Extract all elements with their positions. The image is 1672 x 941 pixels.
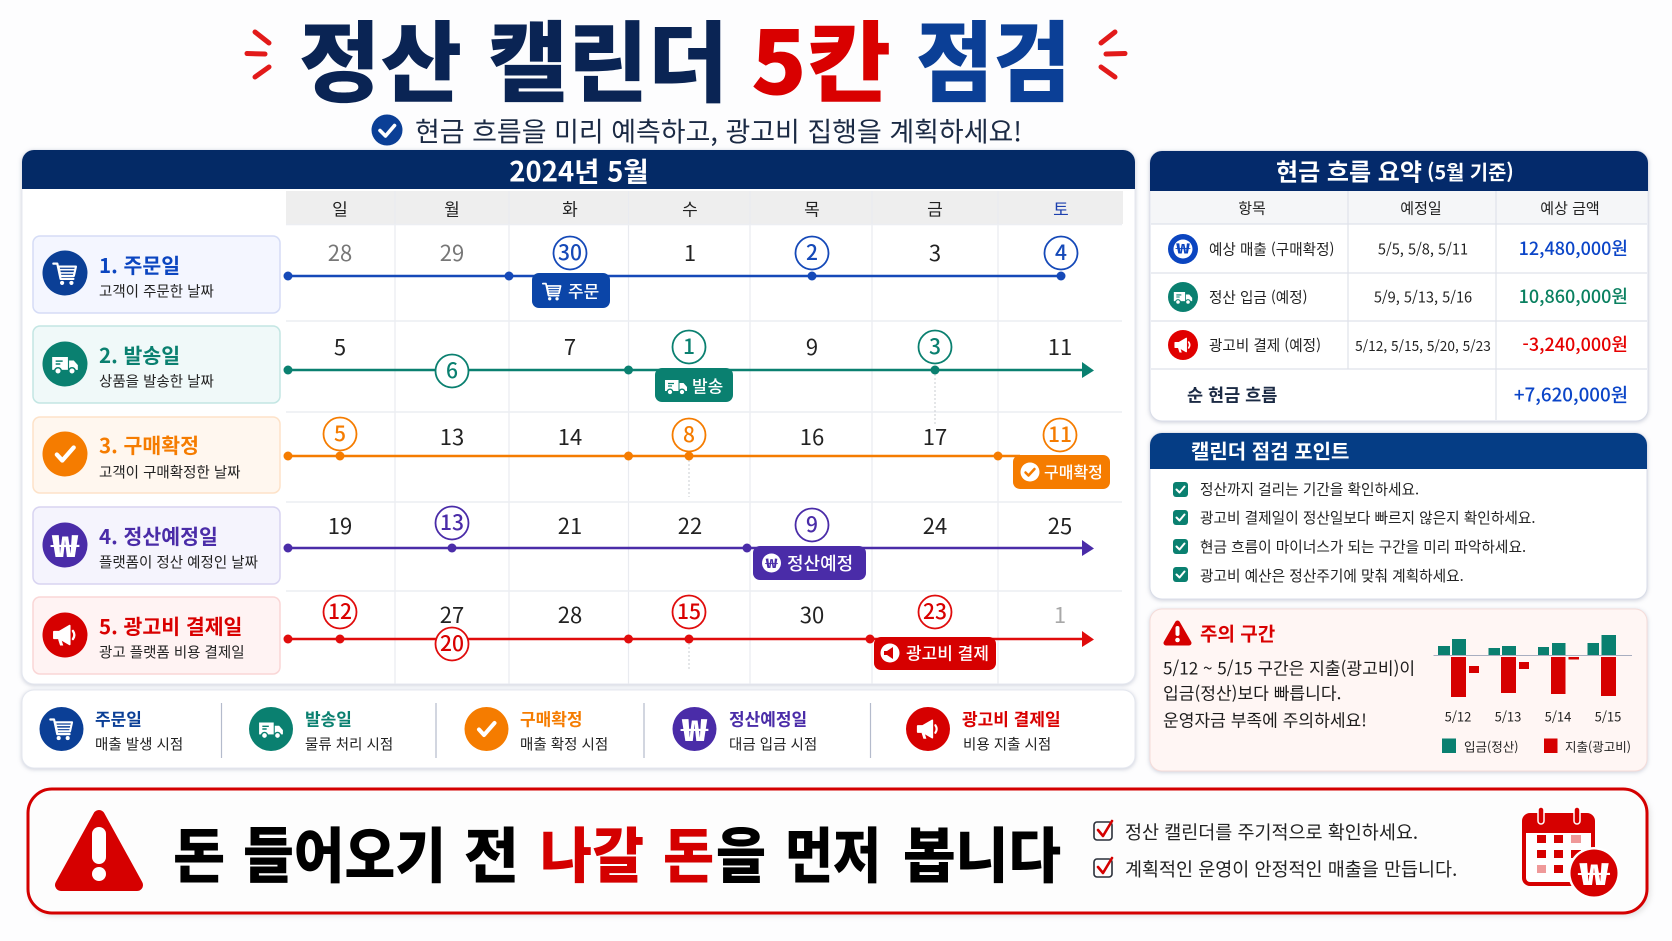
row: 예상 매출 (1168, 234, 1628, 264)
legend: 주문일: 매출 발생 시점 (95, 734, 183, 754)
calendar row 4 timeline: 9 (806, 509, 818, 539)
calendar row 3 timeline: 17 (923, 420, 947, 452)
calendar row 3 timeline: 14 (558, 420, 582, 452)
legend: 광고비 결제일 (906, 706, 1061, 754)
check item 4: 광고비 예산은 정산주기에 맞춰 계획하세요. (1200, 565, 1464, 586)
calendar heading (22, 150, 1135, 190)
row 4 label card: 정산예정일 (33, 507, 280, 584)
panel: caution zone (1150, 609, 1647, 771)
icon: warning triangle (61, 816, 137, 885)
banner heading: 나갈 (540, 808, 644, 896)
row 5 label card: 광고비 결제일: 광고 플랫폼 비용 결제일 (99, 642, 245, 662)
row: 정산 입금: 10,860,000원 (1519, 283, 1628, 309)
calendar row 5 timeline: 1 (1054, 598, 1066, 630)
calendar row 1 timeline: 28 (328, 236, 352, 268)
row 2 label card: 발송일: 2. 발송일 (99, 339, 180, 369)
tag: 주문 (532, 273, 610, 308)
legend: 구매확정: 매출 확정 시점 (520, 734, 608, 754)
legend: 발송일 (249, 706, 393, 754)
icon: calendar with won coin: ₩ (1577, 850, 1610, 894)
tag: 주문: 주문 (568, 278, 599, 302)
row 1 label card: 주문일 (33, 236, 280, 313)
legend: 정산예정일: 대금 입금 시점 (729, 734, 817, 754)
bar chart: 5/12 (1445, 706, 1471, 726)
banner check item 1: 정산 캘린더를 주기적으로 확인하세요. (1125, 819, 1418, 845)
chart legend: 입금(정산) (1464, 736, 1518, 756)
row: 정산 입금 (1168, 282, 1628, 312)
row: 정산 입금: 5/9, 5/13, 5/16 (1374, 286, 1472, 308)
weekday header: 금 (927, 196, 943, 220)
calendar row 3 timeline: 8 (683, 419, 695, 449)
title (299, 0, 1071, 120)
weekday header: 토 (1053, 196, 1069, 220)
check item 1: 정산까지 걸리는 기간을 확인하세요. (1200, 478, 1419, 500)
weekday header: 목 (804, 196, 820, 220)
tag: 광고비 결제 (874, 637, 996, 670)
calendar row 4 timeline: 13 (440, 507, 464, 537)
calendar row 1 timeline: 29 (440, 236, 464, 268)
icon: right sparks (1101, 32, 1125, 77)
calendar row 4 timeline: 24 (923, 509, 947, 541)
panel: calendar (22, 150, 1135, 684)
caution text: 5/12 ~ 5/15 구간은 지출(광고비)이 (1163, 654, 1415, 680)
calendar row 3 timeline (284, 418, 1110, 497)
legend: 주문일 (40, 706, 183, 754)
row: 광고비 결제: 5/12, 5/15, 5/20, 5/23 (1355, 335, 1491, 355)
summary table: 예정일 (1400, 198, 1442, 218)
caution text: 운영자금 부족에 주의하세요! (1163, 706, 1367, 732)
calendar row 5 timeline: 23 (923, 596, 947, 626)
caution text: 입금(정산)보다 빠릅니다. (1163, 680, 1341, 704)
row 2 label card: 발송일 (33, 326, 280, 403)
row 3 label card: 구매확정 (33, 417, 280, 493)
row: 순 현금 흐름: +7,620,000원 (1514, 380, 1628, 408)
calendar row 5 timeline: 27 (440, 598, 464, 630)
tag: 구매확정: 구매확정 (1044, 459, 1103, 483)
panel: calendar check points (1150, 433, 1647, 599)
bar chart: 5/14 (1545, 706, 1571, 726)
calendar row 5 timeline: 15 (677, 596, 701, 626)
check item 3: 현금 흐름이 마이너스가 되는 구간을 미리 파악하세요. (1200, 536, 1526, 557)
icon: left sparks (247, 32, 269, 77)
row: 예상 매출: ₩ (1174, 238, 1191, 258)
row 4 label card: 정산예정일: 4. 정산예정일 (99, 520, 218, 550)
tag: 광고비 결제: 광고비 결제 (906, 640, 989, 664)
summary heading: 현금 흐름 요약 (1276, 152, 1422, 188)
calendar row 4 timeline (284, 506, 1094, 580)
legend: 구매확정 (464, 706, 608, 754)
banner heading: 먼저 (785, 808, 881, 896)
tag: 구매확정 (1013, 455, 1110, 489)
row 2 label card: 발송일: 상품을 발송한 날짜 (99, 370, 214, 392)
calendar row 1 timeline: 4 (1055, 237, 1067, 267)
legend: 구매확정: 구매확정 (520, 706, 583, 730)
legend: 정산예정일: ₩ (680, 706, 709, 750)
weekday header: 수 (682, 196, 698, 220)
legend: 발송일: 발송일 (305, 706, 352, 730)
calendar row 5 timeline: 12 (328, 596, 352, 626)
banner heading (173, 808, 1061, 896)
row 5 label card: 광고비 결제일 (33, 597, 280, 674)
row 1 label card: 주문일: 1. 주문일 (99, 249, 180, 279)
tag: 정산예정: ₩ (764, 553, 778, 572)
banner heading: 봅니다 (903, 808, 1061, 896)
summary table: 항목 (1238, 198, 1266, 218)
legend: 정산예정일: 정산예정일 (729, 706, 807, 730)
calendar row 5 timeline (284, 596, 1094, 670)
row 4 label card: 정산예정일: ₩ (50, 522, 80, 566)
banner heading: 을 (716, 808, 766, 896)
calendar row 1 timeline: 3 (929, 236, 941, 268)
chart legend (1442, 736, 1631, 756)
tag: 정산예정 (753, 546, 866, 580)
row: 예상 매출: 12,480,000원 (1519, 235, 1628, 261)
row: 예상 매출: 예상 매출 (구매확정) (1209, 238, 1334, 260)
icon: caution triangle (1166, 623, 1189, 643)
calendar row 5 timeline: 28 (558, 598, 582, 630)
calendar row 2 timeline (284, 330, 1094, 425)
calendar row 3 timeline: 5 (334, 418, 346, 448)
bar chart: 5/13 (1495, 706, 1521, 726)
tag: 정산예정: 정산예정 (787, 550, 853, 576)
row 3 label card: 구매확정: 고객이 구매확정한 날짜 (99, 462, 241, 482)
calendar row 2 timeline: 1 (683, 331, 695, 361)
chart legend: 지출(광고비) (1565, 736, 1631, 756)
row 4 label card: 정산예정일: 플랫폼이 정산 예정인 날짜 (99, 552, 258, 572)
panel: cash flow summary (1150, 151, 1648, 421)
legend: 광고비 결제일: 광고비 결제일 (962, 706, 1061, 730)
banner heading: 전 (464, 808, 519, 896)
calendar row 1 timeline: 2 (806, 237, 818, 267)
row: 순 현금 흐름 (1187, 380, 1628, 408)
calendar row 2 timeline: 6 (446, 355, 458, 385)
tag: 발송: 발송 (692, 372, 723, 398)
caution text (1163, 654, 1415, 732)
calendar row 2 timeline: 5 (334, 330, 346, 362)
weekday header: 월 (444, 196, 460, 220)
panel: legend (22, 690, 1135, 768)
calendar row 2 timeline: 11 (1048, 330, 1072, 362)
calendar row 3 timeline: 16 (800, 420, 824, 452)
row: 광고비 결제: -3,240,000원 (1522, 331, 1628, 357)
banner check item 2: 계획적인 운영이 안정적인 매출을 만듭니다. (1125, 856, 1457, 882)
bar chart: 5/15 (1595, 706, 1621, 726)
weekday header: 일 (332, 196, 348, 220)
row 1 label card: 주문일: 고객이 주문한 날짜 (99, 280, 214, 302)
banner heading: 들어오기 (243, 808, 446, 896)
calendar row 2 timeline: 9 (806, 330, 818, 362)
calendar row 4 timeline: 19 (328, 509, 352, 541)
check item 2: 광고비 결제일이 정산일보다 빠르지 않은지 확인하세요. (1200, 507, 1535, 528)
subtitle: 현금 흐름을 미리 예측하고, 광고비 집행을 계획하세요! (415, 110, 1022, 150)
calendar row 3 timeline: 13 (440, 420, 464, 452)
check points heading (1150, 433, 1647, 469)
row 5 label card: 광고비 결제일: 5. 광고비 결제일 (99, 610, 242, 640)
calendar row 1 timeline: 30 (558, 237, 582, 267)
weekday header: 화 (562, 196, 578, 220)
banner heading: 돈 (173, 808, 225, 896)
calendar row 5 timeline: 20 (440, 628, 464, 658)
calendar row 5 timeline: 30 (800, 598, 824, 630)
calendar heading: 2024년 5월 (509, 150, 649, 190)
calendar row 2 timeline: 3 (929, 331, 941, 361)
caution heading: 주의 구간 (1200, 620, 1275, 646)
summary heading: (5월 기준) (1427, 156, 1514, 186)
summary table (1151, 191, 1647, 420)
legend: 주문일: 주문일 (95, 706, 142, 730)
row 3 label card: 구매확정: 3. 구매확정 (99, 429, 199, 459)
calendar row 4 timeline: 22 (678, 509, 702, 541)
panel: bottom banner (28, 789, 1650, 916)
row: 예상 매출: 5/5, 5/8, 5/11 (1378, 238, 1468, 260)
check points heading: 캘린더 점검 포인트 (1191, 436, 1349, 464)
row: 순 현금 흐름: 순 현금 흐름 (1187, 382, 1277, 408)
legend: 발송일: 물류 처리 시점 (305, 734, 393, 754)
tag: 발송 (655, 368, 733, 402)
calendar row 1 timeline (284, 236, 1078, 308)
calendar row 1 timeline: 1 (684, 236, 696, 268)
bar chart (1434, 635, 1632, 756)
legend: 광고비 결제일: 비용 지출 시점 (963, 734, 1051, 754)
legend: 정산예정일 (672, 706, 817, 754)
row: 광고비 결제: 광고비 결제 (예정) (1209, 334, 1321, 356)
banner heading: 돈 (663, 808, 714, 896)
row: 정산 입금: 정산 입금 (예정) (1209, 286, 1308, 308)
weekday header (286, 191, 1123, 684)
calendar row 3 timeline: 11 (1048, 419, 1072, 449)
calendar row 2 timeline: 7 (564, 330, 576, 362)
icon: calendar with won coin (1524, 807, 1620, 899)
row: 광고비 결제 (1168, 330, 1628, 360)
summary heading (1150, 151, 1648, 191)
calendar row 4 timeline: 25 (1048, 509, 1072, 541)
summary table: 예상 금액 (1540, 198, 1600, 218)
calendar row 4 timeline: 21 (558, 509, 582, 541)
